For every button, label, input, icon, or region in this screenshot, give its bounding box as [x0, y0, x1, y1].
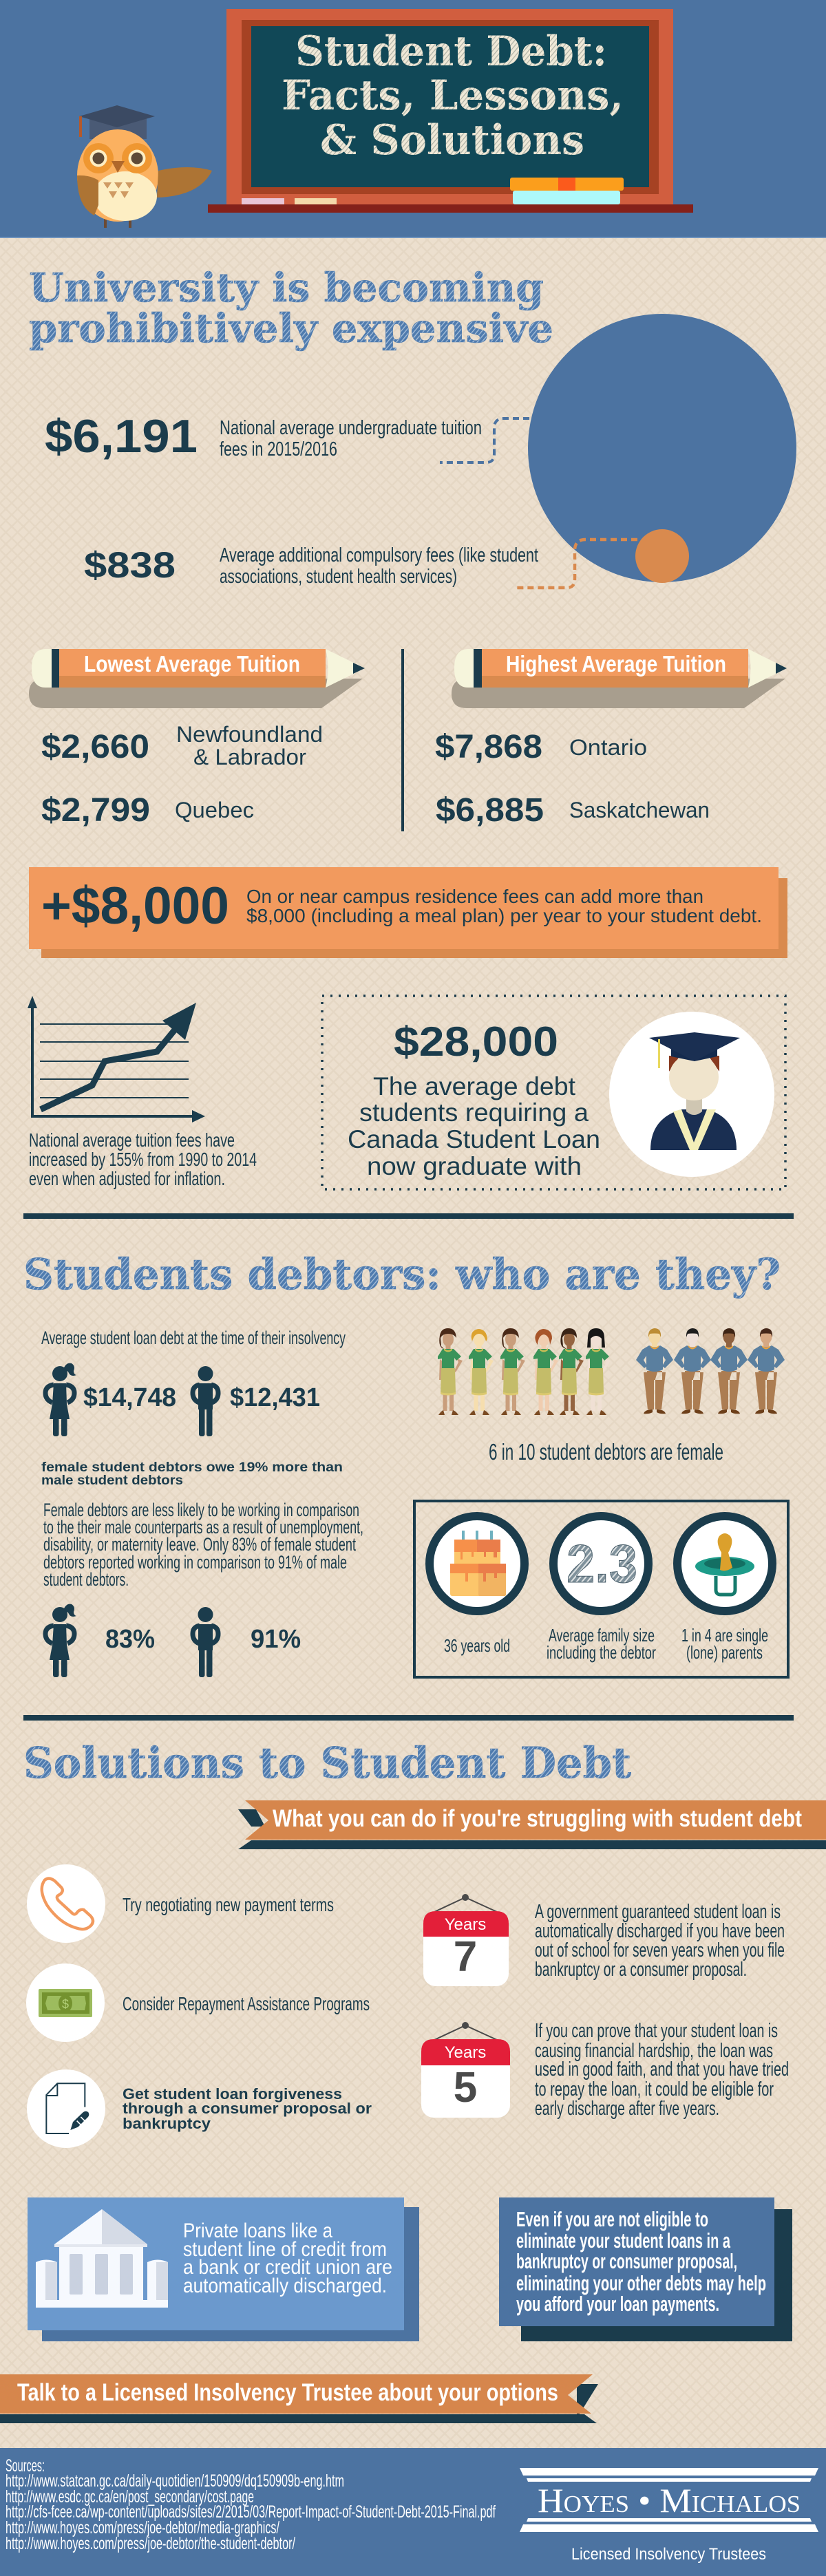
panel: private loans: student line of credit from	[183, 2238, 387, 2261]
text: average debt label: Average student loan debt at the time of their insolvency	[41, 1328, 346, 1348]
caption: family size	[547, 1625, 656, 1663]
panel: eliminate other debts: Even if you are not eligible to	[516, 2207, 708, 2231]
list: highest tuition provinces: Saskatchewan	[569, 798, 710, 822]
panel: $28,000 average debt: The average debt	[373, 1072, 576, 1100]
text: employment paragraph: disability, or maternity leave. Only 83% of female student	[43, 1534, 356, 1555]
callout: +$8,000 residence fees	[29, 867, 787, 958]
text: loan forgiveness	[123, 2085, 372, 2132]
list: lowest tuition provinces: Quebec	[175, 798, 254, 822]
text: loan forgiveness: bankruptcy	[123, 2115, 211, 2132]
icon: calendar 5 years: Years	[445, 2043, 486, 2062]
panel: debtor profile	[414, 1501, 788, 1677]
icon: bank building	[36, 2209, 168, 2308]
text: employment paragraph: student debtors.	[43, 1569, 129, 1590]
title	[282, 28, 624, 164]
text: 5 years discharge: early discharge after five years.	[535, 2098, 719, 2120]
icon: pacifier	[677, 1516, 772, 1611]
heading: who are they: Students debtors: who are they?	[23, 1249, 781, 1299]
panel: private loans: Private loans like a	[183, 2220, 332, 2242]
text: loan forgiveness: through a consumer proposal or	[123, 2100, 372, 2117]
text: employment paragraph	[43, 1500, 363, 1590]
text: negotiate: Try negotiating new payment terms	[123, 1894, 334, 1915]
stat: $838 fees: associations, student health services)	[220, 566, 457, 588]
icon: group of four men	[636, 1328, 785, 1414]
text: employment paragraph: debtors reported working in comparison to 91% of male	[43, 1552, 347, 1573]
stat: employment percentages	[105, 1625, 301, 1654]
panel: private loans: automatically discharged.	[183, 2275, 387, 2297]
panel: $28,000 average debt: $28,000	[394, 1019, 558, 1065]
pencil: lowest average tuition	[29, 649, 365, 708]
stat: $6,191 tuition: $6,191	[45, 410, 198, 462]
title: Facts, Lessons,	[282, 72, 624, 120]
caption: family size: including the debtor	[547, 1642, 656, 1663]
heading: solutions: Solutions to Student Debt	[23, 1738, 631, 1788]
sources list: http://www.hoyes.com/press/joe-debtor/media-graphics/	[6, 2518, 279, 2537]
icon: 2.3 family size: 2.3	[566, 1533, 637, 1594]
panel: $28,000 average debt: now graduate with	[367, 1152, 582, 1180]
icon: banknote	[26, 1963, 105, 2042]
logo: Hoyes Michalos	[520, 2468, 818, 2564]
stat: $6,191 tuition: fees in 2015/2016	[220, 438, 337, 460]
sources list	[6, 2456, 496, 2553]
stat: $6,191 tuition	[45, 410, 482, 462]
list: highest tuition provinces	[435, 729, 710, 829]
callout: +$8,000 residence fees: On or near campus residence fees can add more than	[246, 886, 703, 907]
header band	[0, 0, 826, 238]
icon: document and pencil	[27, 2069, 105, 2148]
footer band	[0, 2448, 826, 2576]
text: female debtors owe more: female student debtors owe 19% more than	[41, 1460, 343, 1475]
text: 5 years discharge	[535, 2020, 789, 2120]
sources list: http://www.hoyes.com/press/joe-debtor/the-student-debtor/	[6, 2534, 295, 2553]
caption: lone parents: 1 in 4 are single	[681, 1625, 768, 1646]
list: highest tuition provinces: Ontario	[569, 735, 647, 760]
icon: telephone	[27, 1864, 105, 1943]
stat: debt amounts	[83, 1383, 320, 1412]
panel: private loans: a bank or credit union are	[183, 2256, 392, 2279]
icon: 2.3 family size	[553, 1516, 648, 1611]
stat: employment percentages: 83%	[105, 1625, 155, 1654]
text: tuition increase: increased by 155% from 1990 to 2014	[29, 1149, 257, 1170]
text: 6 in 10 female: 6 in 10 student debtors are female	[489, 1439, 723, 1465]
text: female debtors owe more	[41, 1460, 343, 1488]
icon: birthday cake	[430, 1516, 525, 1611]
heading: university expensive: University is becoming	[29, 264, 544, 311]
icon: calendar 7 years	[423, 1894, 509, 1986]
stat: debt amounts: $14,748	[83, 1383, 176, 1412]
icon: group of six women	[438, 1328, 611, 1415]
caption: lone parents	[681, 1625, 768, 1663]
callout: +$8,000 residence fees: +$8,000	[41, 877, 229, 935]
banner: talk to a trustee	[0, 2374, 598, 2423]
caption: age: 36 years old	[444, 1635, 510, 1656]
text: loan forgiveness: Get student loan forgiveness	[123, 2085, 342, 2103]
text: tuition increase: even when adjusted for inflation.	[29, 1168, 225, 1189]
stat: $838 fees: Average additional compulsory fees (like student	[220, 544, 538, 566]
stat: $838 fees	[84, 544, 538, 588]
text: tuition increase: National average tuition fees have	[29, 1129, 235, 1151]
caption: family size: Average family size	[549, 1625, 655, 1646]
panel: $28,000 average debt: students requiring a	[359, 1098, 589, 1127]
title: & Solutions	[320, 116, 584, 164]
icon: calendar 7 years: Years	[445, 1915, 486, 1934]
icon: graduate	[609, 1012, 774, 1177]
stat: debt amounts: $12,431	[230, 1383, 320, 1412]
chart: tuition vs fees proportional circles	[440, 314, 796, 588]
sources list: Sources:	[6, 2456, 45, 2476]
panel: eliminate other debts: you afford your loan payments.	[516, 2292, 719, 2316]
icon: male figure employment	[193, 1607, 218, 1677]
heading: university expensive	[29, 264, 553, 352]
icon: calendar 5 years: 5	[454, 2064, 477, 2111]
list: lowest tuition provinces: $2,660	[41, 729, 149, 765]
heading: university expensive: prohibitively expensive	[29, 305, 553, 352]
pencil: highest average tuition	[452, 649, 787, 708]
pencil: lowest average tuition: Lowest Average Tuition	[84, 651, 300, 677]
text: employment paragraph: Female debtors are less likely to be working in comparison	[43, 1500, 359, 1520]
banner: talk to a trustee: Talk to a Licensed Insolvency Trustee about your options	[17, 2379, 558, 2406]
panel: private loans	[28, 2197, 419, 2341]
icon: female figure debt	[45, 1363, 76, 1436]
icon: banknote: $	[62, 1997, 69, 2011]
list: lowest tuition provinces: Newfoundland	[176, 722, 323, 747]
icon: owl mascot	[77, 105, 212, 228]
list: lowest tuition provinces: & Labrador	[193, 745, 306, 769]
text: employment paragraph: to the their male counterparts as a result of unemployment,	[43, 1517, 363, 1537]
icon: male figure debt	[193, 1366, 218, 1436]
text: 7 years discharge	[535, 1901, 785, 1981]
sources list: http://www.statcan.gc.ca/daily-quotidien/150909/dq150909b-eng.htm	[6, 2471, 344, 2491]
sources list: http://www.esdc.gc.ca/en/post_secondary/cost.page	[6, 2487, 254, 2506]
icon: calendar 7 years: 7	[454, 1933, 477, 1981]
pencil: highest average tuition: Highest Average Tuition	[506, 651, 726, 677]
sources list: http://cfs-fcee.ca/wp-content/uploads/sites/2/2015/03/Report-Impact-of-Student-Debt-2015-Final.pdf	[6, 2502, 496, 2522]
list: lowest tuition provinces: $2,799	[41, 792, 150, 829]
icon: female figure employment	[45, 1604, 76, 1677]
stat: $838 fees: $838	[84, 545, 176, 586]
stat: employment percentages: 91%	[251, 1625, 301, 1654]
icon: calendar 5 years	[421, 2022, 510, 2118]
logo: Hoyes Michalos: Hoyes • Michalos	[538, 2481, 801, 2520]
list: lowest tuition provinces	[41, 722, 323, 829]
panel: $28,000 average debt: Canada Student Loan	[348, 1125, 600, 1153]
text: female debtors owe more: male student debtors	[41, 1473, 183, 1488]
chart: rising tuition line	[28, 996, 205, 1122]
list: highest tuition provinces: $6,885	[436, 792, 544, 829]
caption: lone parents: (lone) parents	[686, 1642, 763, 1663]
panel: eliminate other debts	[499, 2197, 792, 2341]
banner: what you can do	[238, 1800, 826, 1849]
title: Student Debt:	[295, 28, 607, 76]
text: tuition increase	[29, 1129, 257, 1189]
stat: $6,191 tuition: National average undergraduate tuition	[220, 417, 482, 439]
logo: Hoyes Michalos: Licensed Insolvency Trustees	[571, 2545, 766, 2564]
callout: +$8,000 residence fees: $8,000 (including a meal plan) per year to your student debt.	[246, 905, 762, 926]
panel: $28,000 average debt	[322, 996, 785, 1189]
text: repayment assistance: Consider Repayment Assistance Programs	[123, 1993, 370, 2014]
list: highest tuition provinces: $7,868	[435, 729, 542, 765]
chalkboard	[208, 9, 693, 213]
